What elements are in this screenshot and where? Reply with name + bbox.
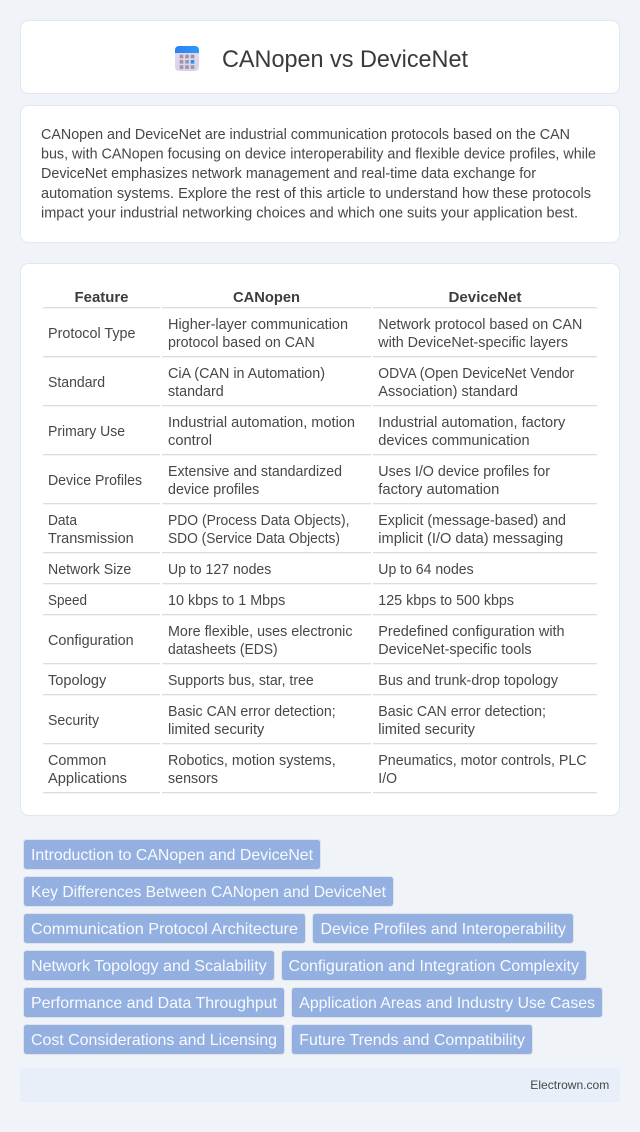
row: topology: Bus and trunk-drop topology xyxy=(378,673,559,689)
row: protocol type: Protocol Type xyxy=(48,326,136,342)
row: speed xyxy=(48,593,514,609)
row: common applications xyxy=(48,753,587,787)
row: data transmission: Data xyxy=(48,513,77,529)
row: configuration: DeviceNet-specific tools xyxy=(378,642,532,658)
tag: introduction xyxy=(24,840,320,870)
intro text block: CANopen and DeviceNet are industrial communication protocols based on the CAN xyxy=(41,127,570,143)
row: protocol type: Network protocol based on CAN xyxy=(378,317,582,333)
row: device profiles: Extensive and standardized xyxy=(168,464,342,480)
tag: cost xyxy=(24,1024,284,1054)
row: configuration: datasheets (EDS) xyxy=(168,642,278,658)
title: CANopen vs DeviceNet xyxy=(222,46,468,73)
row: security: Basic CAN error detection; xyxy=(168,704,336,720)
row: primary use: Industrial automation, factory xyxy=(378,415,566,431)
row: security: limited security xyxy=(378,722,476,738)
tag: application areas: Application Areas and Industry Use Cases xyxy=(299,995,595,1012)
table header row: Feature xyxy=(74,289,128,306)
row: standard: standard xyxy=(168,384,224,400)
row: speed: 10 kbps to 1 Mbps xyxy=(168,593,285,609)
row: network size: Up to 64 nodes xyxy=(378,562,474,578)
tag: configuration: Configuration and Integration Complexity xyxy=(288,958,579,975)
row: data transmission: PDO (Process Data Objects), xyxy=(168,513,350,529)
row: primary use: devices communication xyxy=(378,433,530,449)
row: configuration: Configuration xyxy=(48,633,134,649)
row: speed: Speed xyxy=(48,593,87,609)
tag: device profiles xyxy=(312,914,574,944)
tag: performance xyxy=(24,988,284,1018)
intro text block: bus, with CANopen focusing on device interoperability and flexible device profiles, while xyxy=(41,147,596,163)
row: data transmission: implicit (I/O data) messaging xyxy=(378,531,563,547)
row: data transmission xyxy=(48,513,566,547)
row: network size xyxy=(48,562,474,578)
row: data transmission: Explicit (message-based) and xyxy=(378,513,566,529)
row: security: Security xyxy=(48,713,100,729)
tag: cost: Cost Considerations and Licensing xyxy=(31,1032,277,1049)
tag: performance: Performance and Data Throughput xyxy=(31,995,278,1012)
row: primary use xyxy=(48,415,566,449)
table header row xyxy=(74,289,522,306)
row: configuration: More flexible, uses electronic xyxy=(168,624,352,640)
panel: topic tags xyxy=(24,840,602,1054)
table header row: DeviceNet xyxy=(448,289,522,306)
row: topology: Topology xyxy=(48,673,107,689)
row: standard xyxy=(48,366,574,400)
row: standard: ODVA (Open DeviceNet Vendor xyxy=(378,366,574,382)
row: common applications: Robotics, motion systems, xyxy=(168,753,336,769)
tag: application areas xyxy=(292,988,602,1018)
row: security: limited security xyxy=(168,722,265,738)
row: protocol type: with DeviceNet-specific layers xyxy=(377,335,568,351)
row: device profiles xyxy=(48,464,550,498)
intro text block: automation systems. Explore the rest of this article to understand how these protocols xyxy=(41,186,591,202)
tag: protocol architecture: Communication Protocol Architecture xyxy=(31,921,298,938)
row: standard: Association) standard xyxy=(378,384,518,400)
row: common applications: Applications xyxy=(48,771,127,787)
row: protocol type: Higher-layer communication xyxy=(168,317,348,333)
row: data transmission: Transmission xyxy=(48,531,134,547)
intro text block: DeviceNet emphasizes network management and real-time data exchange for xyxy=(41,166,536,182)
tag: introduction: Introduction to CANopen and DeviceNet xyxy=(31,847,314,864)
tag: protocol architecture xyxy=(24,914,306,944)
row: device profiles: device profiles xyxy=(168,482,259,498)
footer xyxy=(20,1068,620,1102)
panel: comparison table xyxy=(20,264,620,816)
tag: future trends: Future Trends and Compatibility xyxy=(299,1032,525,1049)
panel: title header xyxy=(20,20,620,94)
row: common applications: Common xyxy=(48,753,106,769)
row: common applications: I/O xyxy=(378,771,397,787)
tag: key differences: Key Differences Between CANopen and DeviceNet xyxy=(31,884,387,901)
row: speed: 125 kbps to 500 kbps xyxy=(378,593,514,609)
footer: Electrown.com xyxy=(530,1078,609,1092)
row: protocol type: protocol based on CAN xyxy=(168,335,315,351)
tag: configuration xyxy=(282,950,586,980)
tag: device profiles: Device Profiles and Interoperability xyxy=(320,921,566,938)
row: device profiles: Device Profiles xyxy=(48,473,142,489)
row: common applications: Pneumatics, motor controls, PLC xyxy=(378,753,587,769)
row: common applications: sensors xyxy=(168,771,218,787)
row: topology: Supports bus, star, tree xyxy=(168,673,314,689)
row: primary use: control xyxy=(168,433,212,449)
row: standard: Standard xyxy=(48,375,105,391)
row: device profiles: Uses I/O device profiles for xyxy=(378,464,550,480)
table header row: CANopen xyxy=(233,289,300,306)
row: security: Basic CAN error detection; xyxy=(378,704,546,720)
row: primary use: Primary Use xyxy=(48,424,125,440)
row: configuration: Predefined configuration with xyxy=(378,624,565,640)
tag: network topology xyxy=(24,950,274,980)
intro text block xyxy=(41,127,596,221)
row: data transmission: SDO (Service Data Objects) xyxy=(168,531,340,547)
panel: introduction xyxy=(20,106,620,242)
row: primary use: Industrial automation, motion xyxy=(168,415,355,431)
row: protocol type xyxy=(48,317,582,351)
tag: network topology: Network Topology and Scalability xyxy=(31,958,267,975)
intro text block: impact your industrial networking choices and which one suits your application best. xyxy=(41,205,578,221)
row: device profiles: factory automation xyxy=(378,482,499,498)
row: topology xyxy=(48,673,559,689)
row: network size: Network Size xyxy=(48,562,131,578)
row: network size: Up to 127 nodes xyxy=(168,562,271,578)
row: configuration xyxy=(48,624,565,658)
row: security xyxy=(48,704,546,738)
row: standard: CiA (CAN in Automation) xyxy=(168,366,325,382)
icon: calendar xyxy=(175,46,199,71)
tag: future trends xyxy=(292,1024,532,1054)
tag: key differences xyxy=(24,876,394,906)
